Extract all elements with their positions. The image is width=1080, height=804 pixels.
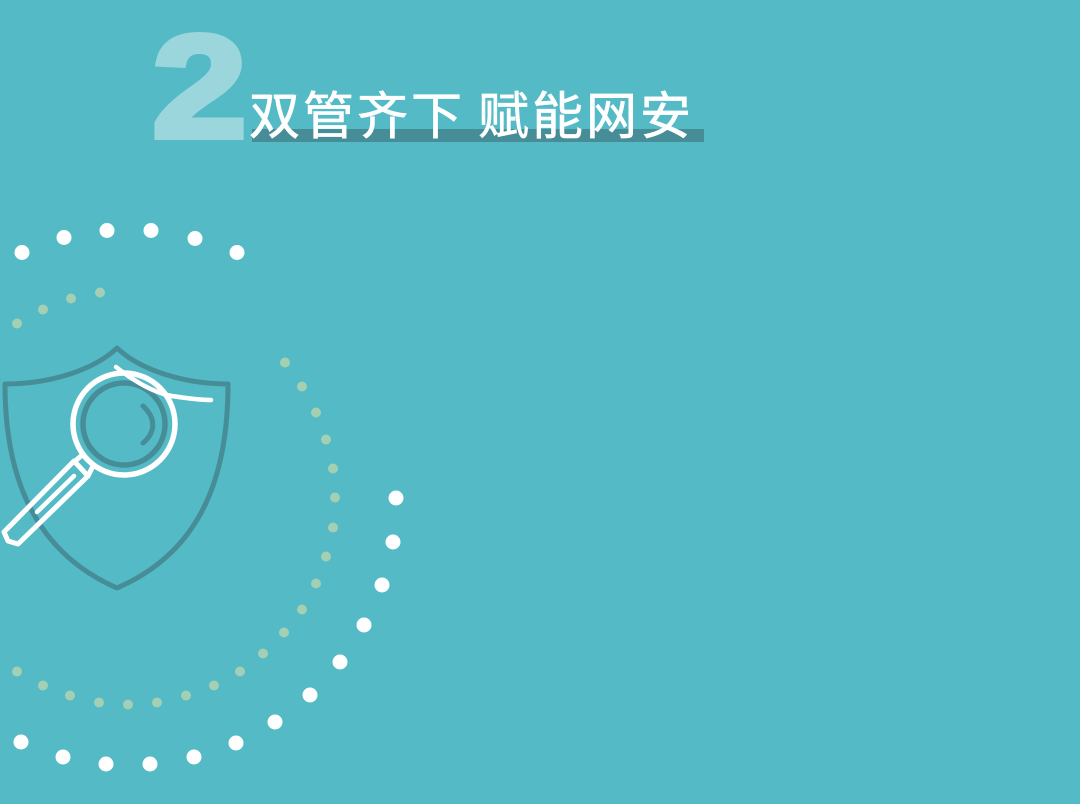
icon: magnifier neck [74,456,92,476]
outer white dotted arc, top [14,223,244,260]
title underline bar [252,129,704,142]
inner green dotted arc, right and bottom [12,358,340,710]
title: 双管齐下赋能网安 [249,88,691,145]
icon: magnifier handle [4,461,88,544]
icon: lens inner ring [83,383,165,465]
inner green dotted arc, top [12,288,105,328]
icon: handle inner line [37,476,74,512]
icon: shield with magnifying glass [4,348,228,588]
icon: lens outer ring [73,373,175,475]
outer white dotted arc, right and bottom [14,490,404,772]
section number 2: 2 [152,5,247,168]
icon: shield highlight stroke [116,367,211,400]
icon: lens glare [143,406,153,443]
icon: shield outline [5,348,228,588]
